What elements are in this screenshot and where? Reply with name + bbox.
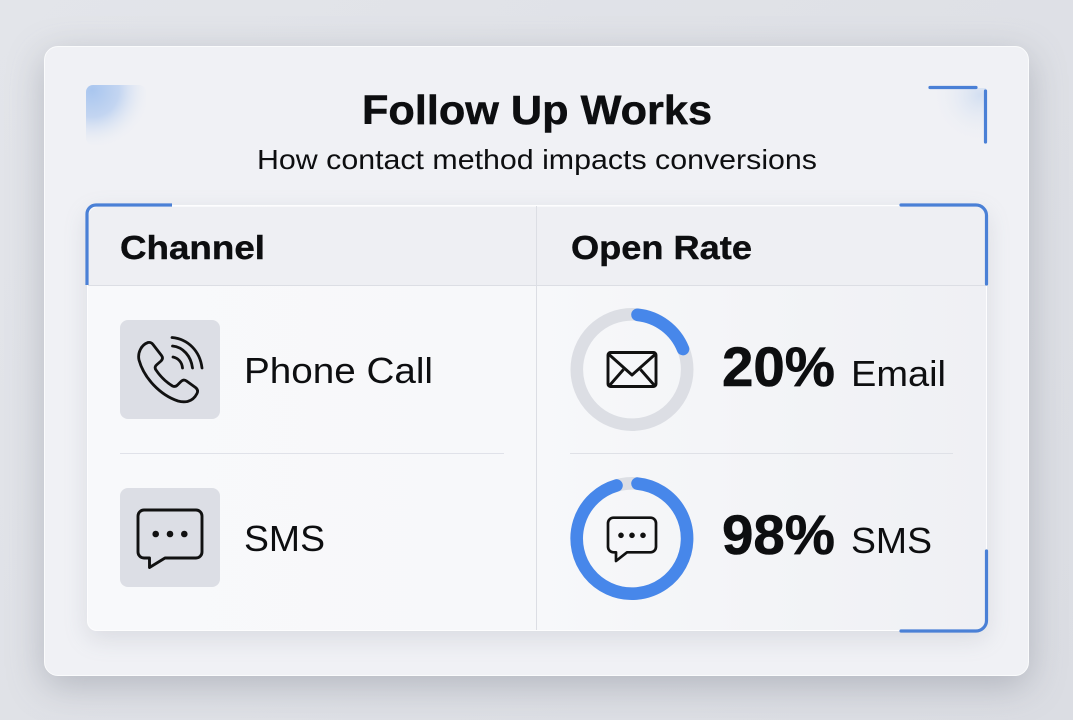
icon: phone call <box>120 320 220 419</box>
icon: chat bubble <box>120 488 220 587</box>
label: Email: Email <box>851 353 946 394</box>
panel: table <box>87 205 987 631</box>
decoration: top-left corner glow <box>86 85 146 145</box>
icon: envelope <box>608 352 656 386</box>
donut chart: 98% <box>577 483 687 594</box>
label: SMS: SMS <box>851 520 932 561</box>
row: Phone Call <box>120 320 433 419</box>
row: Email open rate <box>577 314 946 425</box>
accent: table top-right corner bracket <box>901 205 986 284</box>
value: 20%: 20% <box>722 335 835 398</box>
icon: chat bubble <box>608 518 656 561</box>
header: Channel: Channel <box>120 229 265 266</box>
label: SMS <box>244 518 325 559</box>
subtitle: How contact method impacts conversions <box>257 144 817 175</box>
row: SMS <box>120 488 325 587</box>
accent: table bottom-right corner bracket <box>901 551 986 631</box>
donut chart: 20% <box>577 314 687 425</box>
table header band <box>88 207 985 285</box>
row: SMS open rate <box>577 483 932 594</box>
header: Open Rate: Open Rate <box>571 229 752 266</box>
value: 98%: 98% <box>722 503 835 566</box>
decoration: top-right corner accent <box>926 88 986 144</box>
title: Follow Up Works <box>362 87 712 133</box>
accent: table top-left corner bracket <box>87 205 172 285</box>
label: Phone Call <box>244 350 433 391</box>
